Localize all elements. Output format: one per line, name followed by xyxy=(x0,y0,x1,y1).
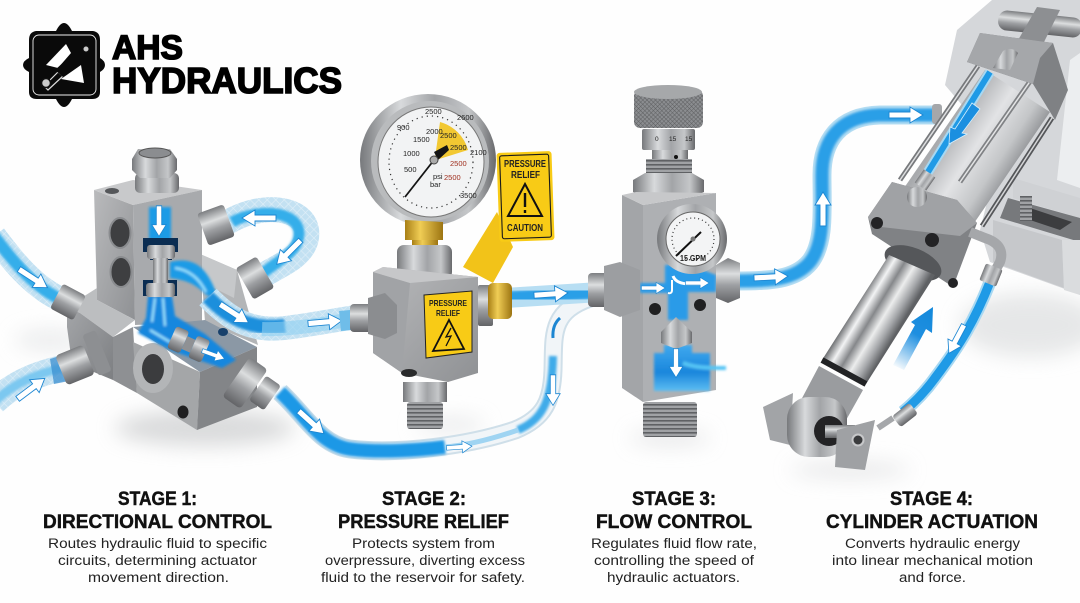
gauge: 1500 xyxy=(413,135,430,144)
gauge xyxy=(360,94,496,226)
cutaway channels xyxy=(640,265,726,391)
flow arrows stage 1 xyxy=(13,206,343,405)
lower head block xyxy=(868,169,977,288)
logo wordmark: AHS xyxy=(112,29,183,67)
right hex fitting xyxy=(716,258,740,303)
left hex fitting xyxy=(588,262,640,317)
feed hose xyxy=(340,319,362,321)
logo badge xyxy=(23,23,105,107)
logo wordmark: HYDRAULICS xyxy=(112,60,342,101)
flow arrow xyxy=(533,285,569,303)
gauge: 2500 xyxy=(444,173,461,182)
gauge: psi xyxy=(433,172,443,181)
horizontal beams xyxy=(993,178,1080,295)
caption: stage 3: controlling the speed of xyxy=(594,553,754,568)
frame back panel xyxy=(945,0,1080,295)
gauge: 3500 xyxy=(460,191,477,200)
micrometer collar: 15 xyxy=(685,136,693,143)
outlet hose to right xyxy=(208,297,356,329)
caption: stage 3: FLOW CONTROL xyxy=(596,512,752,533)
lower blue tube xyxy=(878,263,1003,428)
top pin xyxy=(997,7,1080,46)
small gauge xyxy=(657,204,727,274)
micrometer collar: 0 xyxy=(655,136,659,143)
rear right block xyxy=(200,254,258,345)
caption: stage 4: CYLINDER ACTUATION xyxy=(826,512,1038,533)
stage 2 pressure relief valve xyxy=(340,94,600,429)
body sign: RELIEF xyxy=(436,308,460,318)
caption: stage 3: STAGE 3: xyxy=(632,489,716,510)
caption: stage 3 xyxy=(591,489,757,585)
caption: stage 2: fluid to the reservoir for safety. xyxy=(321,570,525,585)
top head block xyxy=(967,33,1068,120)
caption: stage 3: Regulates fluid flow rate, xyxy=(591,536,757,551)
yellow arm xyxy=(463,212,513,283)
body xyxy=(373,267,478,382)
gauge: 1000 xyxy=(403,149,420,158)
caption: stage 1 xyxy=(43,489,272,585)
upper blue tube xyxy=(928,72,990,172)
gauge: 2000 xyxy=(426,127,443,136)
cutaway blue channels xyxy=(138,207,236,368)
right fitting xyxy=(478,283,512,326)
body sign: PRESSURE xyxy=(429,298,467,308)
micrometer collar xyxy=(642,129,695,162)
pipe to cylinder xyxy=(735,104,942,286)
gauge: bar xyxy=(430,180,441,189)
caption: stage 4: into linear mechanical motion xyxy=(832,553,1033,568)
caption: stage 3: hydraulic actuators. xyxy=(607,570,740,585)
caption: stage 2 xyxy=(321,489,525,585)
stage 4 hydraulic cylinder xyxy=(763,33,1068,470)
stage 3 flow control valve xyxy=(588,85,942,437)
caption: stage 1: movement direction. xyxy=(88,570,229,585)
caption: stage 1: circuits, determining actuator xyxy=(58,553,258,568)
barrel xyxy=(904,70,1050,232)
tower cut wall xyxy=(133,190,202,325)
caption: stage 2: PRESSURE RELIEF xyxy=(338,512,509,533)
frame upright xyxy=(1057,53,1080,188)
rear loop hose xyxy=(222,210,307,280)
caution sign: PRESSURE xyxy=(504,158,546,170)
left body face xyxy=(622,195,643,402)
caption: stage 2: Protects system from xyxy=(352,536,495,551)
hose collars xyxy=(50,204,281,410)
caption: stage 4 xyxy=(826,489,1038,585)
logo wordmark xyxy=(112,29,342,101)
caption: stage 4: and force. xyxy=(899,570,966,585)
pipe core xyxy=(505,292,600,298)
stage 4 machine frame xyxy=(945,0,1080,295)
caption: stage 4: Converts hydraulic energy xyxy=(845,536,1020,551)
piston rod xyxy=(800,238,946,422)
left fitting xyxy=(350,293,397,339)
caption: stage 1: STAGE 1: xyxy=(118,489,197,510)
caption: stage 4: STAGE 4: xyxy=(890,489,973,510)
small gauge: 15 GPM xyxy=(680,253,706,263)
gauge: 2500 xyxy=(450,159,467,168)
caption: stage 1: Routes hydraulic fluid to specific xyxy=(48,536,267,551)
pipe to stage 3 xyxy=(505,292,600,298)
collar xyxy=(397,245,452,279)
caution sign xyxy=(496,151,555,242)
elbow fitting xyxy=(970,232,1001,280)
caption: stage 2: STAGE 2: xyxy=(382,489,466,510)
bottom thread xyxy=(403,382,447,429)
brass stem xyxy=(405,220,443,249)
hex nut xyxy=(633,173,704,197)
clevis mount xyxy=(763,393,875,470)
gauge: 2500 xyxy=(440,131,457,140)
gauge: 2500 xyxy=(450,143,467,152)
gauge: 2100 xyxy=(470,148,487,157)
stage captions xyxy=(43,489,1038,585)
knob xyxy=(634,85,703,128)
gauge: 2600 xyxy=(457,113,474,122)
neck thread xyxy=(646,159,692,177)
gauge: 500 xyxy=(404,165,417,174)
micrometer collar: 15 xyxy=(669,136,677,143)
body sign xyxy=(424,291,472,358)
base block xyxy=(67,288,257,430)
tower top face xyxy=(94,180,202,205)
blue motion arrow xyxy=(893,307,933,370)
caption: stage 2: overpressure, diverting excess xyxy=(325,553,525,568)
long pipe from stage 1 to return line xyxy=(280,298,590,454)
top face xyxy=(622,192,716,205)
tower ports xyxy=(110,218,132,287)
tie rods xyxy=(900,66,1052,226)
caution sign: RELIEF xyxy=(511,169,540,181)
front body face xyxy=(643,193,716,402)
gauge: 900 xyxy=(397,123,410,132)
logo xyxy=(23,23,342,107)
left hoses xyxy=(0,236,74,402)
caution sign: CAUTION xyxy=(507,222,543,234)
tower left face xyxy=(94,190,135,320)
floor shadows xyxy=(15,293,1080,478)
gauge: 2500 xyxy=(425,107,442,116)
caption: stage 1: DIRECTIONAL CONTROL xyxy=(43,512,272,533)
stage 1 directional control valve xyxy=(0,148,356,430)
top fitting xyxy=(132,148,179,193)
bottom thread xyxy=(643,402,697,437)
